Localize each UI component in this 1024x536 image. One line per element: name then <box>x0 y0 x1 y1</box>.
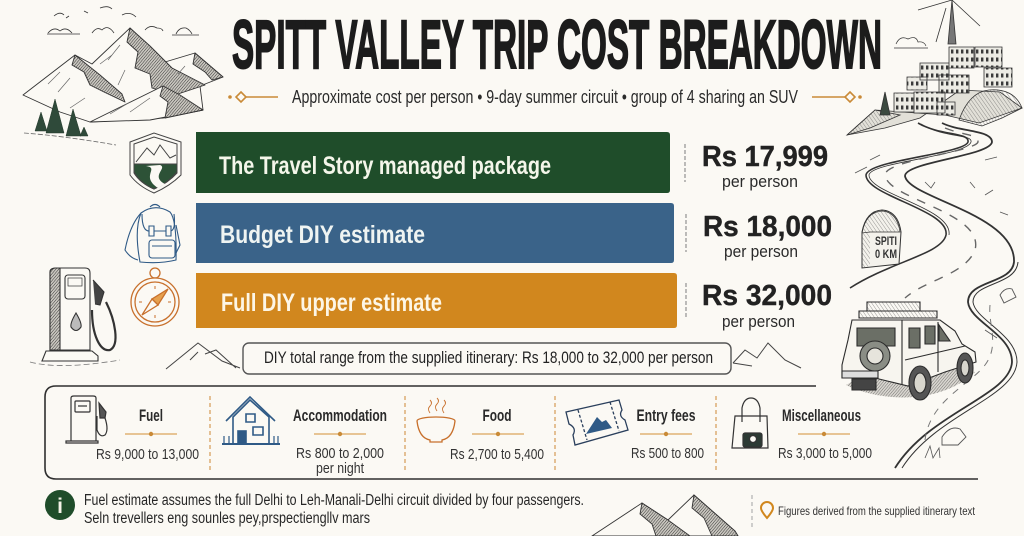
item: Miscellaneous: Miscellaneous <box>782 406 861 425</box>
item: Fuel: Rs 9,000 to 13,000 <box>96 446 199 463</box>
note: fuel estimate: Fuel estimate assumes the full Delhi to Leh-Manali-Delhi circuit divided by four passengers. <box>84 492 584 509</box>
icon: soup bowl <box>417 398 455 442</box>
item: Entry fees: Entry fees <box>636 406 696 425</box>
illustration: large fuel pump <box>30 268 120 366</box>
illustration: footer mountains <box>592 495 738 536</box>
icon: shield badge <box>130 133 181 193</box>
value: Rs 18,000: Rs 18,000 <box>703 211 832 243</box>
bar: The Travel Story managed package: The Travel Story managed package <box>219 152 551 180</box>
icon: tote bag with camera <box>732 398 768 448</box>
panel: cost options <box>125 132 832 331</box>
item: Fuel: Fuel <box>139 406 163 425</box>
illustration: mountains top left <box>23 7 223 145</box>
item: Accommodation: Accommodation <box>293 406 387 425</box>
item: Accommodation <box>222 397 387 477</box>
icon: backpack <box>125 204 180 263</box>
illustration: SUV <box>842 302 976 400</box>
icon: fuel pump <box>66 396 107 443</box>
bar: The Travel Story managed package <box>196 132 670 193</box>
icon: compass <box>131 268 179 326</box>
illustration: winding road <box>850 123 1018 468</box>
callout: DIY total range: DIY total range from the supplied itinerary: Rs 18,000 to 32,000 per person <box>264 349 713 367</box>
subtitle: Approximate cost per person • 9-day summer circuit • group of 4 sharing an SUV <box>292 87 798 107</box>
value: Rs 17,999: per person <box>722 172 798 191</box>
illustration: milestone SPITI 0 KM: SPITI <box>875 234 897 248</box>
bar: Full DIY upper estimate: Full DIY upper estimate <box>221 289 442 317</box>
item: Accommodation: per night <box>316 460 365 477</box>
bar: Full DIY upper estimate <box>196 273 677 328</box>
item: Accommodation: Rs 800 to 2,000 <box>296 445 384 462</box>
illustration: milestone SPITI 0 KM: 0 KM <box>875 247 897 261</box>
note: fuel estimate <box>45 490 584 527</box>
value: Rs 18,000 <box>686 211 832 261</box>
callout: DIY total range <box>166 343 801 374</box>
item: Entry fees: Rs 500 to 800 <box>631 445 704 462</box>
note: source: Figures derived from the supplied itinerary text <box>778 504 976 518</box>
value: Rs 17,999 <box>685 141 828 191</box>
item: Fuel <box>66 396 199 463</box>
value: Rs 18,000: per person <box>724 242 798 261</box>
bar: Budget DIY estimate: Budget DIY estimate <box>220 221 425 249</box>
item: Food <box>417 398 544 463</box>
item: Entry fees <box>566 400 704 462</box>
panel: cost breakdown <box>45 386 978 479</box>
illustration: milestone SPITI 0 KM <box>862 210 901 268</box>
bar: Budget DIY estimate <box>196 203 674 263</box>
item: Miscellaneous: Rs 3,000 to 5,000 <box>778 445 872 462</box>
value: Rs 32,000 <box>686 280 832 331</box>
icon: info: i <box>57 495 63 518</box>
icon: ticket <box>566 400 628 445</box>
item: Miscellaneous <box>732 398 872 462</box>
icon: info <box>45 490 75 520</box>
item: Food: Rs 2,700 to 5,400 <box>450 446 544 463</box>
note: source <box>752 495 976 530</box>
value: Rs 32,000: Rs 32,000 <box>702 280 832 312</box>
item: Food: Food <box>482 406 512 425</box>
illustration: hilltop village with prayer flags <box>847 0 1022 135</box>
icon: house <box>222 397 280 444</box>
note: fuel estimate: Seln trevellers eng sounles pey,prspectiengllv mars <box>84 510 370 527</box>
value: Rs 17,999: Rs 17,999 <box>702 141 828 173</box>
value: Rs 32,000: per person <box>722 312 795 331</box>
